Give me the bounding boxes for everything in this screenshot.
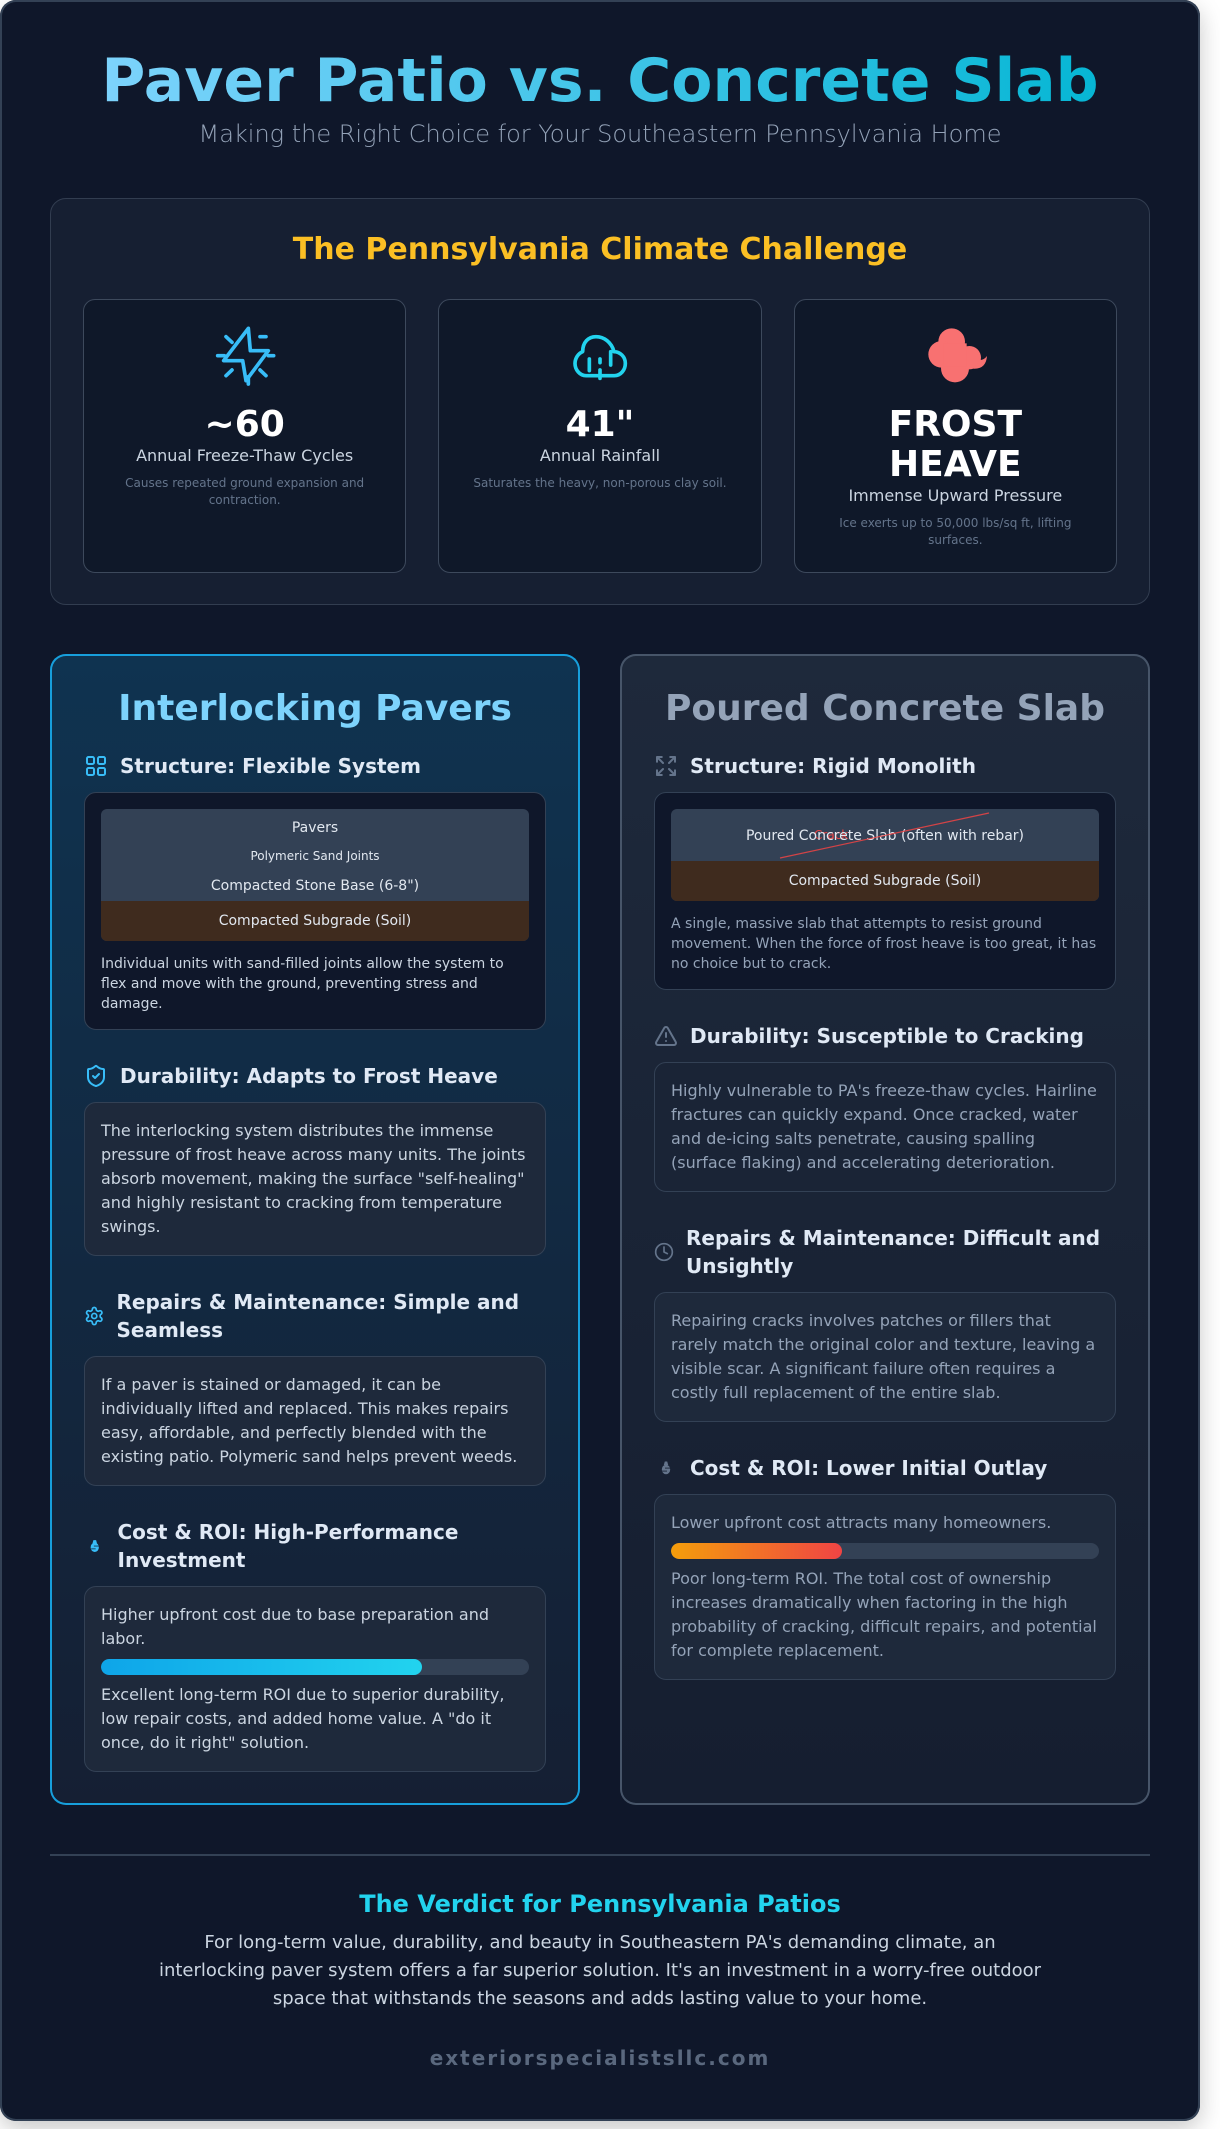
box: repairs text: existing patio. Polymeric sand helps prevent weeds.: [101, 1447, 517, 1466]
heading: structure: Structure: Flexible System: [120, 754, 421, 778]
diagram: paver layers: Pavers: [292, 820, 338, 836]
verdict text: [159, 1932, 1041, 2009]
cost bar: concrete: [671, 1543, 1099, 1559]
box: cost text and bar: labor. Excellent long-term ROI due to superior durability,: [101, 1629, 504, 1704]
box: repairs text: [84, 1356, 546, 1486]
box: repairs text: Repairing cracks involves patches or fillers that: [671, 1311, 1051, 1330]
box: structure diagram and text: damage.: [101, 996, 163, 1012]
stat number: [889, 404, 1022, 485]
box: structure diagram and text: movement. When the force of frost heave is too great, it has: [671, 936, 1096, 952]
heading: structure: Structure: Rigid Monolith: [690, 754, 976, 778]
cost bar: pavers: [101, 1659, 529, 1675]
box: repairs text: visible scar. A significant failure often requires a: [671, 1359, 1055, 1378]
icon: frost heave blob: [928, 328, 987, 382]
diagram: slab layers: Compacted Subgrade (Soil): [789, 873, 981, 889]
diagram: paver layers: [101, 809, 529, 941]
stat card: frost heave: [794, 299, 1117, 573]
heading: repairs: Unsightly: [686, 1254, 793, 1278]
box: durability text: pressure of frost heave across many units. The joints: [101, 1145, 525, 1164]
climate heading: The Pennsylvania Climate Challenge: [293, 232, 907, 267]
stat note: contraction.: [209, 493, 281, 507]
box: cost text and bar: Lower upfront cost attracts many homeowners. Poor long-term ROI. The total cost of ownership: [671, 1513, 1051, 1588]
heading: repairs: [654, 1226, 1100, 1278]
heading: repairs: Repairs & Maintenance: Difficult and: [686, 1226, 1100, 1250]
diagram: paver layers: Polymeric Sand Joints: [250, 849, 380, 863]
verdict text: interlocking paver system offers a far superior solution. It's an investment in a worry-free outdoor: [159, 1960, 1041, 1981]
pavers sections: [84, 754, 546, 1772]
section: repairs: [654, 1226, 1116, 1422]
panel: poured concrete slab: [620, 654, 1150, 1805]
stat note: Ice exerts up to 50,000 lbs/sq ft, lifting: [839, 516, 1071, 530]
section: cost: [654, 1456, 1116, 1680]
heading: durability: Durability: Susceptible to Cracking: [690, 1024, 1084, 1048]
stat number: FROST: [889, 404, 1022, 445]
box: cost text and bar: probability of cracking, difficult repairs, and potential: [671, 1617, 1097, 1636]
box: durability text: absorb movement, making the surface "self-healing": [101, 1169, 525, 1188]
heading: cost: [90, 1520, 458, 1572]
diagram: slab layers: Poured Concrete Slab (often with rebar): [746, 828, 1024, 844]
box: durability text: swings.: [101, 1217, 161, 1236]
box: durability text: Highly vulnerable to PA's freeze-thaw cycles. Hairline: [671, 1081, 1097, 1100]
stat note: Saturates the heavy, non-porous clay soil.: [473, 476, 727, 490]
box: cost text and bar: low repair costs, and added home value. A "do it: [101, 1709, 491, 1728]
diagram: slab layers: [671, 809, 1099, 901]
box: repairs text: costly full replacement of the entire slab.: [671, 1383, 1001, 1402]
diagram: slab layers: Crack: [814, 828, 848, 842]
stat label: Annual Rainfall: [540, 446, 660, 465]
heading: repairs: [86, 1290, 519, 1342]
stat note: surfaces.: [928, 533, 983, 547]
heading: cost: Cost & ROI: High-Performance: [118, 1520, 458, 1544]
box: durability text: and highly resistant to cracking from temperature: [101, 1193, 502, 1212]
heading: cost: Investment: [118, 1548, 245, 1572]
box: structure diagram and text: Individual units with sand-filled joints allow the system to: [101, 956, 504, 972]
box: durability text: (surface flaking) and accelerating deterioration.: [671, 1153, 1055, 1172]
stat label: Immense Upward Pressure: [848, 486, 1062, 505]
stat note: Causes repeated ground expansion and: [125, 476, 364, 490]
website footer: exteriorspecialistsllc.com: [430, 2046, 770, 2070]
box: structure diagram and text: no choice but to crack.: [671, 956, 831, 972]
section: repairs: [84, 1290, 546, 1486]
stat number: 41": [566, 404, 634, 445]
box: repairs text: [654, 1292, 1116, 1422]
section: durability: [654, 1024, 1116, 1192]
heading: repairs: Seamless: [116, 1318, 223, 1342]
title: Paver Patio vs. Concrete Slab: [101, 46, 1099, 116]
diagram: paver layers: Compacted Stone Base (6-8"): [211, 878, 419, 894]
box: durability text: [654, 1062, 1116, 1192]
box: cost text and bar: Higher upfront cost due to base preparation and: [101, 1605, 489, 1624]
box: repairs text: individually lifted and replaced. This makes repairs: [101, 1399, 508, 1418]
verdict text: space that withstands the seasons and adds lasting value to your home.: [273, 1988, 927, 2009]
concrete sections: [654, 754, 1116, 1680]
box: cost text and bar: [654, 1494, 1116, 1680]
box: durability text: and de-icing salts penetrate, causing spalling: [671, 1129, 1035, 1148]
icon: lightning with sparks: [216, 326, 276, 386]
box: repairs text: easy, affordable, and perfectly blended with the: [101, 1423, 487, 1442]
box: durability text: The interlocking system distributes the immense: [101, 1121, 493, 1140]
box: cost text and bar: once, do it right" solution.: [101, 1733, 309, 1752]
verdict heading: The Verdict for Pennsylvania Patios: [359, 1890, 841, 1918]
section: structure: [84, 754, 546, 1030]
heading: durability: Durability: Adapts to Frost Heave: [120, 1064, 498, 1088]
box: repairs text: If a paver is stained or damaged, it can be: [101, 1375, 441, 1394]
pavers heading: Interlocking Pavers: [118, 688, 512, 729]
box: cost text and bar: [84, 1586, 546, 1772]
section: cost: [84, 1520, 546, 1772]
box: structure diagram and text: A single, massive slab that attempts to resist ground: [671, 916, 1042, 932]
box: cost text and bar: for complete replacement.: [671, 1641, 884, 1660]
stat label: Annual Freeze-Thaw Cycles: [136, 446, 353, 465]
verdict text: For long-term value, durability, and beauty in Southeastern PA's demanding climate, an: [204, 1932, 996, 1953]
stat card: rainfall: [438, 299, 762, 573]
concrete heading: Poured Concrete Slab: [665, 688, 1105, 729]
stat number: HEAVE: [889, 444, 1022, 485]
box: repairs text: rarely match the original color and texture, leaving a: [671, 1335, 1095, 1354]
section: durability: [84, 1064, 546, 1256]
subtitle: Making the Right Choice for Your Southeastern Pennsylvania Home: [198, 120, 1002, 148]
panel: interlocking pavers: [50, 654, 580, 1805]
heading: repairs: Repairs & Maintenance: Simple and: [116, 1290, 519, 1314]
stat number: ~60: [205, 404, 285, 445]
box: cost text and bar: increases dramatically when factoring in the high: [671, 1593, 1067, 1612]
diagram: paver layers: Compacted Subgrade (Soil): [219, 913, 411, 929]
icon: cloud rain: [573, 334, 628, 380]
box: durability text: [84, 1102, 546, 1256]
box: durability text: fractures can quickly expand. Once cracked, water: [671, 1105, 1078, 1124]
stat note: [125, 476, 364, 507]
box: structure diagram and text: [84, 792, 546, 1030]
section: structure: [654, 754, 1116, 990]
box: structure diagram and text: flex and move with the ground, preventing stress and: [101, 976, 478, 992]
box: structure diagram and text: [654, 792, 1116, 990]
heading: cost: Cost & ROI: Lower Initial Outlay: [690, 1456, 1047, 1480]
panel: climate challenge: [50, 198, 1150, 605]
stat note: [839, 516, 1071, 547]
stat card: freeze-thaw: [83, 299, 406, 573]
